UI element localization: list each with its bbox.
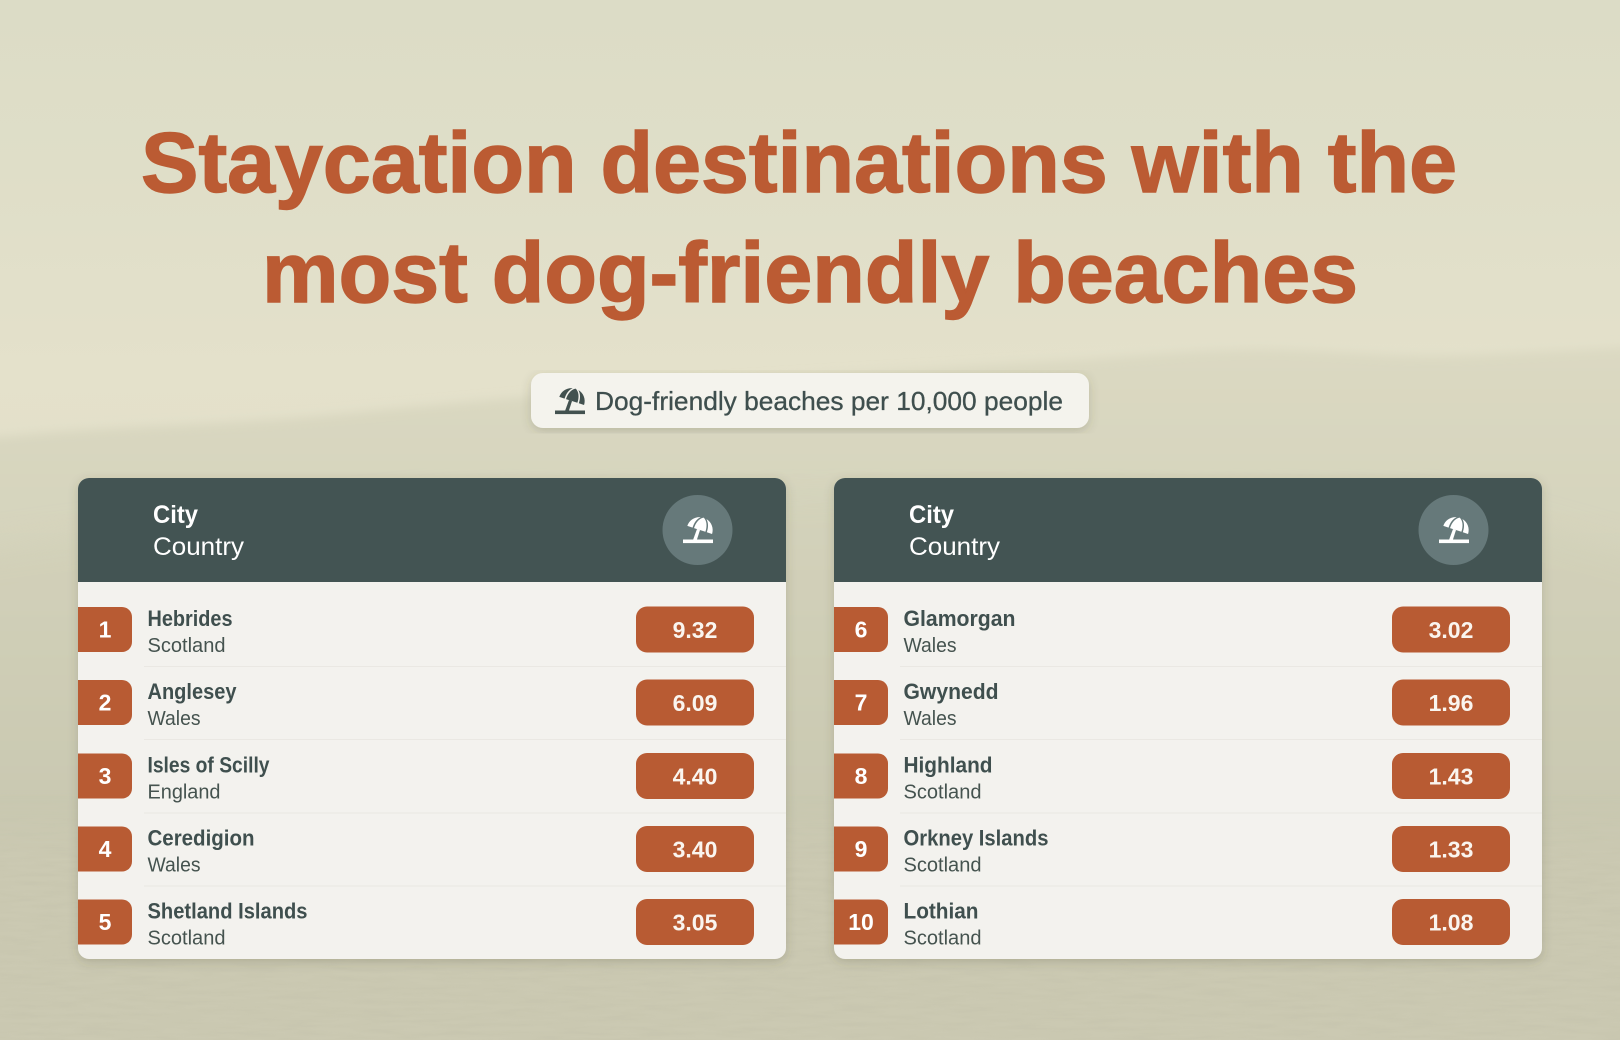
row 7: Gwynedd [834,679,1510,730]
panel: ranks 6 to 10 [834,478,1542,959]
row 9: Orkney Islands: Scotland [904,854,982,876]
row 6: Glamorgan [834,606,1510,657]
row 6: Glamorgan: Wales [904,635,956,657]
row 1: Hebrides [78,606,754,657]
row 2: Anglesey: Wales [148,708,200,730]
row 2: Anglesey [78,679,754,730]
row 4: Ceredigion: Ceredigion [148,826,254,850]
card body [78,478,786,959]
row 8: Highland: 8 [855,763,868,789]
row 7: Gwynedd: Gwynedd [904,679,998,704]
row 9: Orkney Islands [834,826,1510,876]
row 3: Isles of Scilly: Isles of Scilly [148,752,270,778]
row 1: Hebrides: 1 [99,616,112,642]
row 8: Highland: Scotland [904,782,982,804]
legend pill [531,373,1089,428]
header label: Country: Country [909,533,1001,561]
row 7: Gwynedd: Wales [904,708,956,730]
title [141,116,1457,321]
title: Staycation destinations with the [141,116,1457,211]
row 5: Shetland Islands: 3.05 [673,910,718,936]
row 10: Lothian: 1.08 [1429,910,1474,936]
icon: beach umbrella in circle [662,495,732,565]
row 9: Orkney Islands: 1.33 [1429,836,1473,862]
row 7: Gwynedd: 7 [855,690,867,716]
header label: City: City [909,501,954,529]
row 10: Lothian: 10 [848,909,874,935]
row 6: Glamorgan: 3.02 [1429,617,1473,643]
row 10: Lothian: Lothian [904,898,978,924]
icon: beach umbrella [555,385,588,414]
row 10: Lothian: Scotland [904,928,982,950]
header label: Country: Country [153,533,245,561]
row 3: Isles of Scilly: England [148,782,220,804]
row 7: Gwynedd: 1.96 [1429,690,1473,716]
row 8: Highland: Highland [904,752,992,778]
row 4: Ceredigion: 3.40 [673,836,717,862]
title: most dog-friendly beaches [262,226,1358,321]
row 3: Isles of Scilly: 4.40 [673,764,717,790]
row 10: Lothian [834,898,1510,950]
row 9: Orkney Islands: Orkney Islands [904,826,1048,850]
legend text: Dog-friendly beaches per 10,000 people [595,386,1063,416]
row 8: Highland: 1.43 [1429,764,1473,790]
row 4: Ceredigion: Wales [148,854,200,876]
row 6: Glamorgan: 6 [855,616,867,642]
row 4: Ceredigion [78,826,754,876]
row 3: Isles of Scilly: 3 [99,763,111,789]
row 1: Hebrides: Scotland [148,635,226,657]
row 4: Ceredigion: 4 [99,836,112,862]
panel: ranks 1 to 5 [78,478,786,959]
row 5: Shetland Islands [78,898,754,950]
row 5: Shetland Islands: Scotland [148,928,226,950]
row 6: Glamorgan: Glamorgan [904,606,1016,631]
icon: beach umbrella in circle [1418,495,1488,565]
row 9: Orkney Islands: 9 [855,836,867,862]
row 2: Anglesey: 2 [99,690,111,716]
card body [834,478,1542,959]
background: misty beach landscape [0,497,1620,1040]
table header [78,478,786,582]
row 2: Anglesey: Anglesey [148,679,237,704]
row 3: Isles of Scilly [78,752,754,804]
header label: City: City [153,501,198,529]
table header [834,478,1542,582]
row 1: Hebrides: Hebrides [148,606,232,631]
row 1: Hebrides: 9.32 [673,617,717,643]
row 5: Shetland Islands: 5 [99,909,112,935]
row 2: Anglesey: 6.09 [673,690,717,716]
row 5: Shetland Islands: Shetland Islands [148,898,308,924]
row 8: Highland [834,752,1510,804]
